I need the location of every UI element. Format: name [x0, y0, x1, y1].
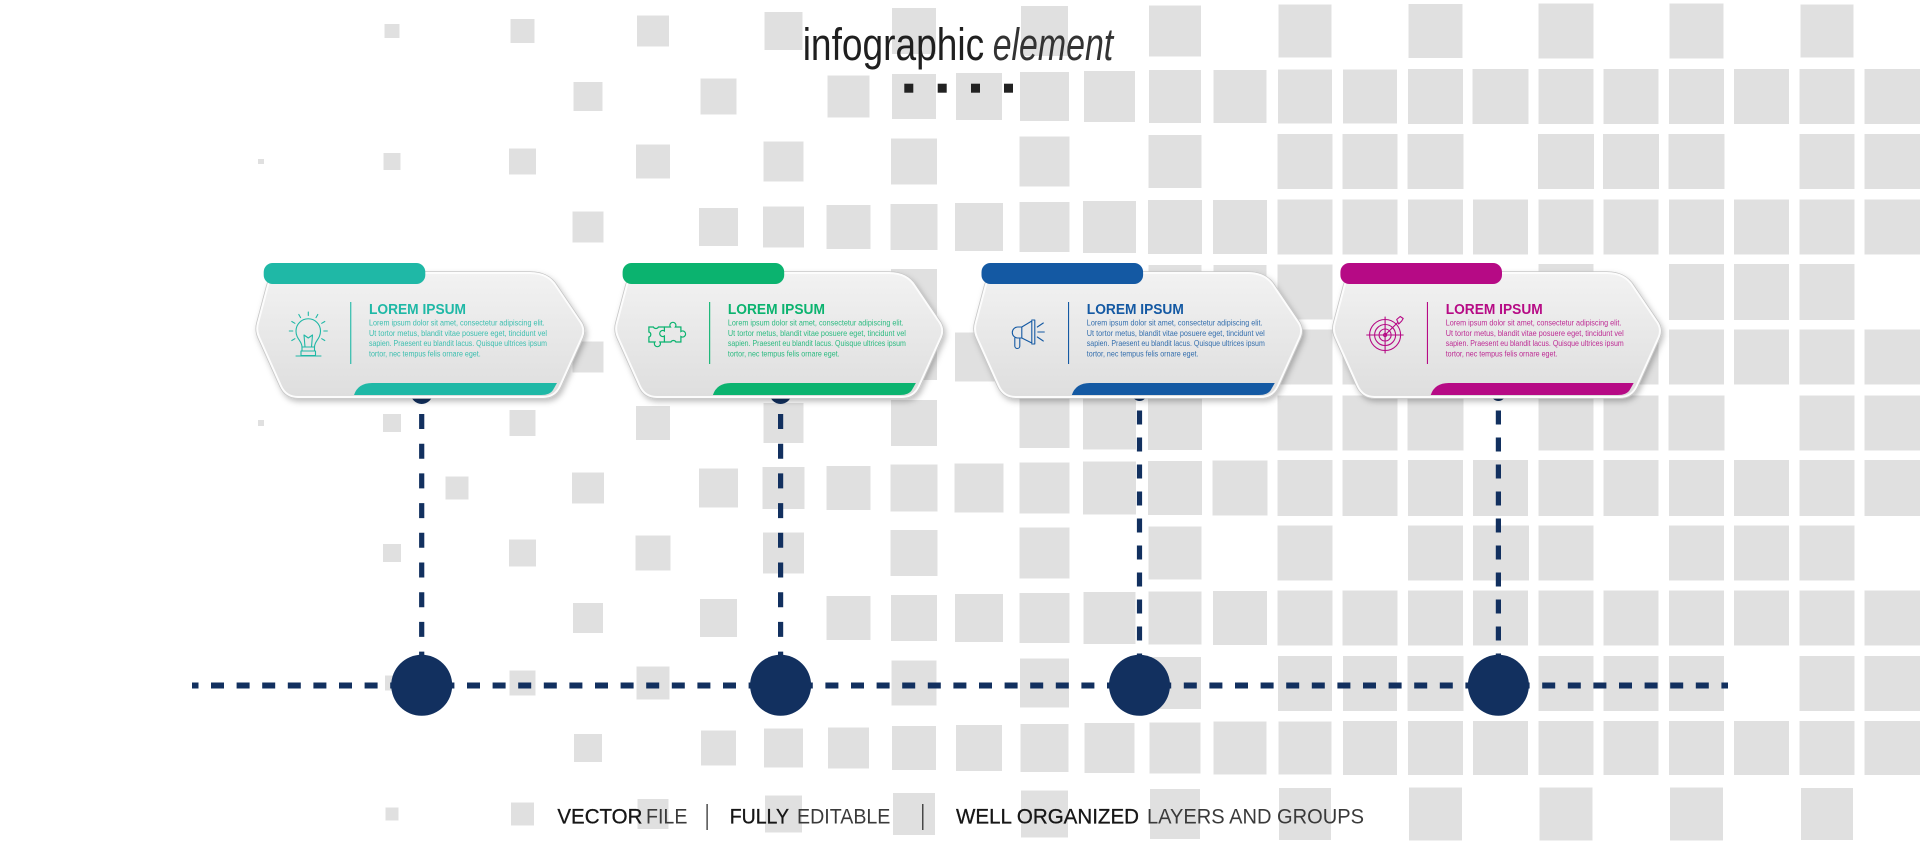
- timeline node 3: [1109, 655, 1170, 716]
- tab: [982, 263, 1143, 284]
- card outline: [1334, 273, 1660, 397]
- body text: Lorem ipsum dolor sit amet, consectetur adipiscing elit.: [369, 318, 545, 328]
- panel: card 4 magenta: [1334, 263, 1660, 397]
- connector 1: [411, 382, 433, 657]
- body text: sapien. Praesent eu blandit lacus. Quisque ultrices ipsum: [1446, 338, 1624, 348]
- timeline: horizontal dashed line: [192, 682, 1728, 688]
- icon: megaphone: [1012, 320, 1044, 349]
- connector 4: [1491, 387, 1505, 657]
- footer text: LAYERS AND GROUPS: [1147, 805, 1364, 828]
- body text: [1446, 318, 1624, 359]
- timeline node 1: [391, 655, 452, 716]
- tab: [264, 263, 425, 284]
- body text: [728, 318, 906, 359]
- body text: Ut tortor metus, blandit vitae posuere eget, tincidunt vel: [369, 328, 547, 338]
- tab: [1340, 263, 1502, 284]
- body text: [1087, 318, 1265, 359]
- heading: LOREM IPSUM: [728, 302, 825, 318]
- body text: Ut tortor metus, blandit vitae posuere eget, tincidunt vel: [1446, 328, 1624, 338]
- panel: card 1 teal: [257, 263, 583, 397]
- timeline node 4: [1468, 655, 1529, 716]
- card body: [975, 273, 1301, 397]
- connector 3: [1132, 387, 1146, 657]
- body text: tortor, nec tempus felis ornare eget.: [1087, 349, 1198, 359]
- body text: sapien. Praesent eu blandit lacus. Quisque ultrices ipsum: [1087, 338, 1265, 348]
- panel: card 3 blue: [975, 263, 1301, 397]
- card outline: [975, 273, 1301, 397]
- card body: [257, 273, 583, 397]
- bottom bar: [354, 383, 557, 395]
- footer text: WELL ORGANIZED: [956, 805, 1139, 828]
- body text: Lorem ipsum dolor sit amet, consectetur adipiscing elit.: [1087, 318, 1262, 328]
- title dots: [904, 84, 1013, 93]
- body text: Ut tortor metus, blandit vitae posuere eget, tincidunt vel: [728, 328, 906, 338]
- card outline: [257, 273, 583, 397]
- connector 2: [770, 382, 792, 657]
- body text: Lorem ipsum dolor sit amet, consectetur adipiscing elit.: [728, 318, 904, 328]
- bottom bar: [1072, 383, 1275, 395]
- body text: Lorem ipsum dolor sit amet, consectetur adipiscing elit.: [1446, 318, 1621, 328]
- icon: target: [1367, 316, 1403, 353]
- bottom bar: [713, 383, 916, 395]
- body text: sapien. Praesent eu blandit lacus. Quisque ultrices ipsum: [728, 338, 906, 348]
- card body: [616, 273, 942, 397]
- icon: light bulb: [289, 312, 327, 356]
- timeline node 2: [750, 655, 811, 716]
- divider: [350, 302, 351, 364]
- divider: [1068, 302, 1069, 364]
- card body: [1334, 273, 1660, 397]
- footer text: FULLY: [730, 805, 789, 828]
- body text: tortor, nec tempus felis ornare eget.: [369, 349, 481, 359]
- panel: card 2 green: [616, 263, 942, 397]
- body text: tortor, nec tempus felis ornare eget.: [728, 349, 840, 359]
- footer text: VECTOR: [557, 805, 642, 828]
- heading: LOREM IPSUM: [1087, 302, 1184, 318]
- body text: sapien. Praesent eu blandit lacus. Quisque ultrices ipsum: [369, 338, 547, 348]
- body text: tortor, nec tempus felis ornare eget.: [1446, 349, 1557, 359]
- footer text: FILE: [646, 805, 687, 828]
- title: infographic: [803, 19, 984, 70]
- tab: [623, 263, 784, 284]
- bottom bar: [1431, 383, 1634, 395]
- icon: puzzle: [649, 322, 686, 347]
- divider: [1427, 302, 1428, 364]
- body text: Ut tortor metus, blandit vitae posuere eget, tincidunt vel: [1087, 328, 1265, 338]
- card outline: [616, 273, 942, 397]
- body text: [369, 318, 547, 359]
- footer text: [557, 804, 1364, 830]
- heading: LOREM IPSUM: [1446, 302, 1543, 318]
- divider: [709, 302, 710, 364]
- footer text: EDITABLE: [797, 805, 890, 828]
- heading: LOREM IPSUM: [369, 302, 466, 318]
- title: element: [993, 19, 1115, 70]
